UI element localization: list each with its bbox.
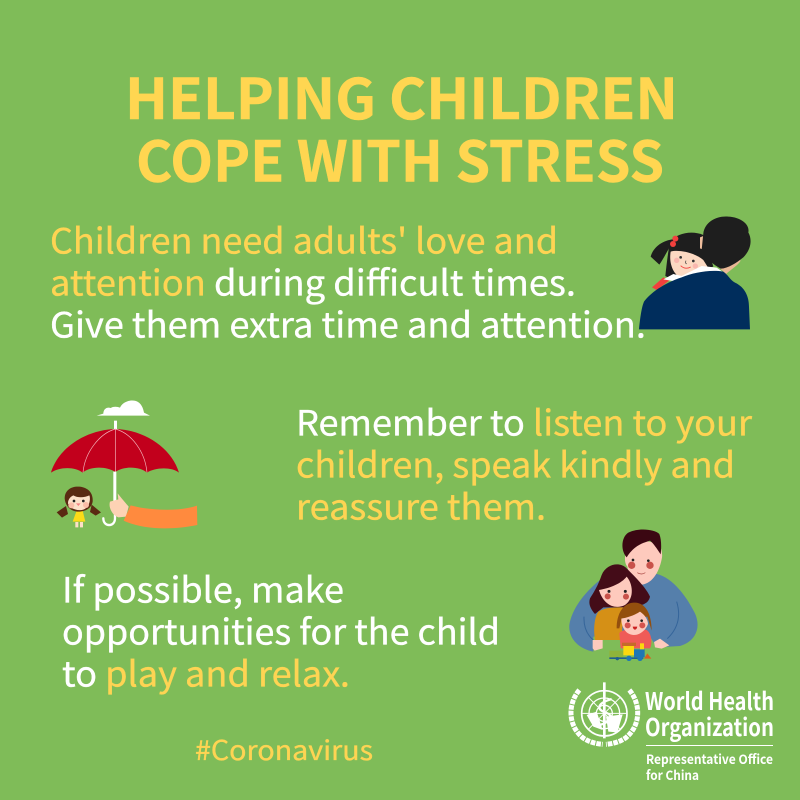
text block: play and relax bbox=[62, 562, 500, 698]
text block: listen to your children: children, speak kindly and bbox=[296, 438, 735, 488]
text block: listen to your children: reassure them. bbox=[296, 480, 546, 530]
text block: play and relax: If possible, make bbox=[62, 562, 344, 614]
logo text: Organization bbox=[645, 708, 774, 743]
text block: adults' love and attention bbox=[50, 214, 646, 348]
logo text: for China bbox=[646, 765, 699, 784]
sleeve bbox=[124, 505, 197, 528]
text block: adults' love and attention: attention during difficult times. bbox=[50, 256, 576, 306]
icon: umbrella held over child bbox=[51, 401, 197, 528]
logo text: World Health bbox=[645, 682, 774, 717]
title bbox=[125, 55, 678, 198]
text block: listen to your children: Remember to listen to your bbox=[296, 396, 752, 446]
hashtag: #Coronavirus bbox=[195, 729, 373, 768]
text block: adults' love and attention: Give them extra time and attention. bbox=[50, 298, 646, 348]
icon: family with toy train bbox=[569, 529, 698, 661]
child bbox=[57, 506, 68, 518]
icon: adult hugging child bbox=[639, 217, 751, 329]
cloud bbox=[97, 401, 150, 416]
logo text bbox=[645, 682, 774, 784]
title: HELPING CHILDREN bbox=[125, 55, 678, 136]
title: COPE WITH STRESS bbox=[136, 118, 664, 198]
text block: play and relax: opportunities for the child bbox=[62, 604, 500, 656]
text block: listen to your children bbox=[296, 396, 752, 530]
logo text: Representative Office bbox=[646, 749, 773, 768]
icon: WHO emblem bbox=[571, 682, 638, 744]
canopy bbox=[51, 429, 179, 473]
logo: World Health Organization bbox=[571, 682, 774, 784]
text block: adults' love and attention: Children need adults' love and bbox=[50, 214, 558, 264]
hand bbox=[110, 493, 129, 517]
text block: play and relax: to play and relax. bbox=[62, 646, 350, 698]
